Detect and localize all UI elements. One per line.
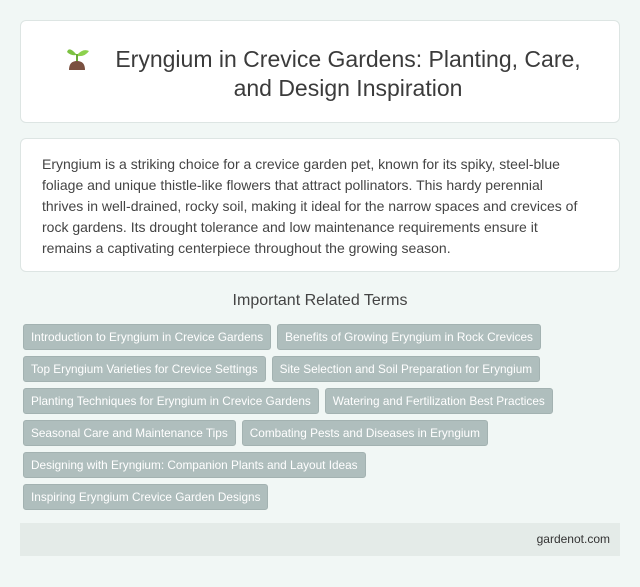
related terms heading: Important Related Terms	[233, 292, 407, 309]
header card	[20, 20, 620, 123]
tags: Seasonal Care and Maintenance Tips	[31, 426, 228, 440]
tags	[23, 324, 553, 510]
tags: Site Selection and Soil Preparation for Eryngium	[280, 362, 532, 376]
title: Eryngium in Crevice Gardens: Planting, Care, and Design Inspiration	[115, 46, 581, 101]
tags: Watering and Fertilization Best Practices	[333, 394, 545, 408]
tags: Combating Pests and Diseases in Eryngium	[250, 426, 480, 440]
footer	[20, 523, 620, 556]
tags: Designing with Eryngium: Companion Plants and Layout Ideas	[31, 458, 358, 472]
tags: Introduction to Eryngium in Crevice Gardens	[31, 330, 263, 344]
tags: Inspiring Eryngium Crevice Garden Designs	[31, 490, 260, 504]
tags: Top Eryngium Varieties for Crevice Settings	[31, 362, 258, 376]
footer text: gardenot.com	[537, 532, 610, 546]
description text: Eryngium is a striking choice for a crevice garden pet, known for its spiky, steel-blue foliage and unique thistle-like flowers that attract pollinators. This hardy perennial thrives in well-drained, rocky soil, making it ideal for the narrow spaces and crevices of rock gardens. Its drought tolerance and low maintenance requirements ensure it remains a captivating centerpiece throughout the growing season.	[42, 156, 577, 256]
icon: seedling	[67, 49, 89, 70]
tags: Planting Techniques for Eryngium in Crevice Gardens	[31, 394, 311, 408]
description card	[20, 138, 620, 272]
tags: Benefits of Growing Eryngium in Rock Crevices	[285, 330, 533, 344]
